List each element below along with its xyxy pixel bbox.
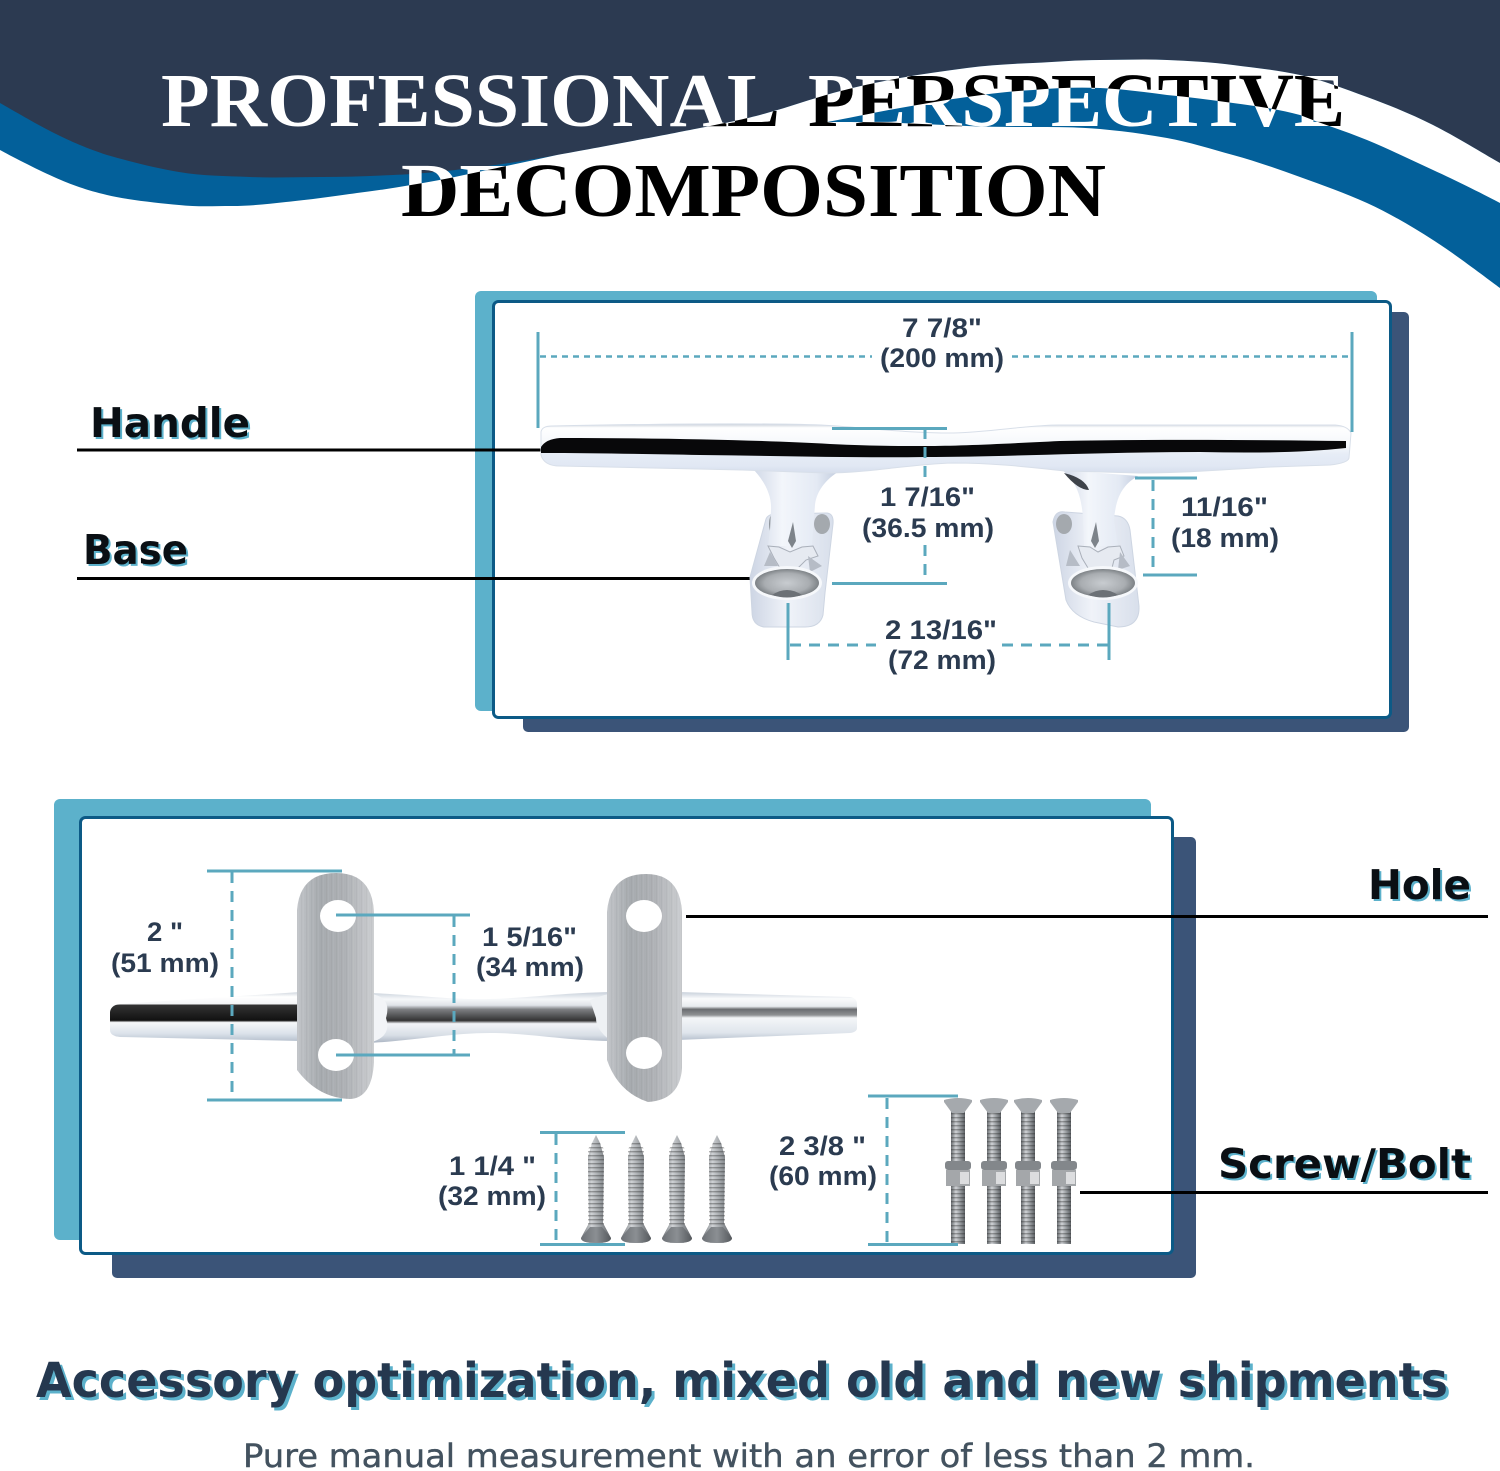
dimension: screw length 1 1/4 in: 1 1/4 " [449, 1151, 536, 1181]
label: Hole: Hole [1368, 861, 1471, 909]
leader line: base [77, 577, 752, 580]
dimension: hole spacing 2 13/16 in: (72 mm) [888, 645, 996, 675]
dimension: screw length 1 1/4 in: (32 mm) [438, 1181, 546, 1211]
title: PROFESSIONAL [161, 59, 780, 143]
dimension: bolt length 2 3/8 in [769, 1096, 958, 1244]
title: DECOMPOSITION [401, 149, 1106, 233]
leader line: hole [686, 915, 1488, 918]
label: Handle: Handle [90, 399, 250, 447]
left post flare detail [768, 546, 818, 568]
cleat: side view photo [541, 424, 1351, 627]
dimension: hole spacing 1 5/16 in [336, 915, 584, 1055]
dimension: height 1 7/16 in: (36.5 mm) [862, 513, 994, 543]
dimension: bolt length 2 3/8 in: 2 3/8 " [779, 1131, 866, 1161]
dimension: hole spacing 2 13/16 in: 2 13/16" [885, 615, 997, 645]
dimension: clearance 11/16 in: 11/16" [1181, 492, 1268, 522]
title: PERSPECTIVE [808, 59, 1345, 143]
cleat: bottom view photo [110, 873, 857, 1102]
dimension: hole spacing 1 5/16 in: (34 mm) [476, 952, 584, 982]
right post [1062, 470, 1138, 546]
bar: middle segment [370, 992, 610, 1043]
dimension: height 1 7/16 in [832, 428, 994, 584]
right post flare detail [1078, 546, 1124, 568]
left post [752, 468, 838, 546]
dimension: plate length 2 in: 2 " [147, 917, 183, 947]
dimension: overall length 7 7/8 in: (200 mm) [880, 343, 1004, 373]
leader line: screw and bolt [1080, 1191, 1488, 1194]
left plate [297, 873, 374, 1099]
handle bar [541, 424, 1351, 473]
label: Screw/Bolt: Screw/Bolt [1218, 1140, 1471, 1188]
dimension: plate length 2 in [111, 871, 342, 1100]
dimension: plate length 2 in: (51 mm) [111, 948, 219, 978]
dimension: overall length 7 7/8 in [538, 313, 1352, 432]
dimension: clearance 11/16 in: (18 mm) [1171, 523, 1279, 553]
dimension: height 1 7/16 in: 1 7/16" [880, 482, 975, 512]
machine bolts [944, 1098, 1078, 1244]
panel: side view card [475, 291, 1409, 732]
bar: left segment [110, 992, 300, 1041]
right plate [607, 874, 682, 1102]
title [161, 59, 1345, 233]
label: Base: Base [83, 526, 188, 574]
dimension: hole spacing 1 5/16 in: 1 5/16" [482, 922, 577, 952]
panel: bottom view card [54, 799, 1196, 1278]
base cups [752, 566, 822, 600]
dimension: screw length 1 1/4 in [438, 1132, 625, 1244]
header wave banner [0, 0, 1500, 300]
right base [1053, 512, 1139, 627]
dimension: clearance 11/16 in [1135, 478, 1279, 575]
bar: right segment [678, 992, 857, 1040]
leader line: handle [77, 448, 545, 452]
dimension: hole spacing 2 13/16 in [788, 603, 1109, 675]
footer heading: Accessory optimization, mixed old and new shipments [36, 1353, 1448, 1409]
left base [750, 513, 833, 627]
dimension: overall length 7 7/8 in: 7 7/8" [902, 313, 982, 343]
wood screws [581, 1135, 732, 1243]
dimension: bolt length 2 3/8 in: (60 mm) [769, 1161, 877, 1191]
